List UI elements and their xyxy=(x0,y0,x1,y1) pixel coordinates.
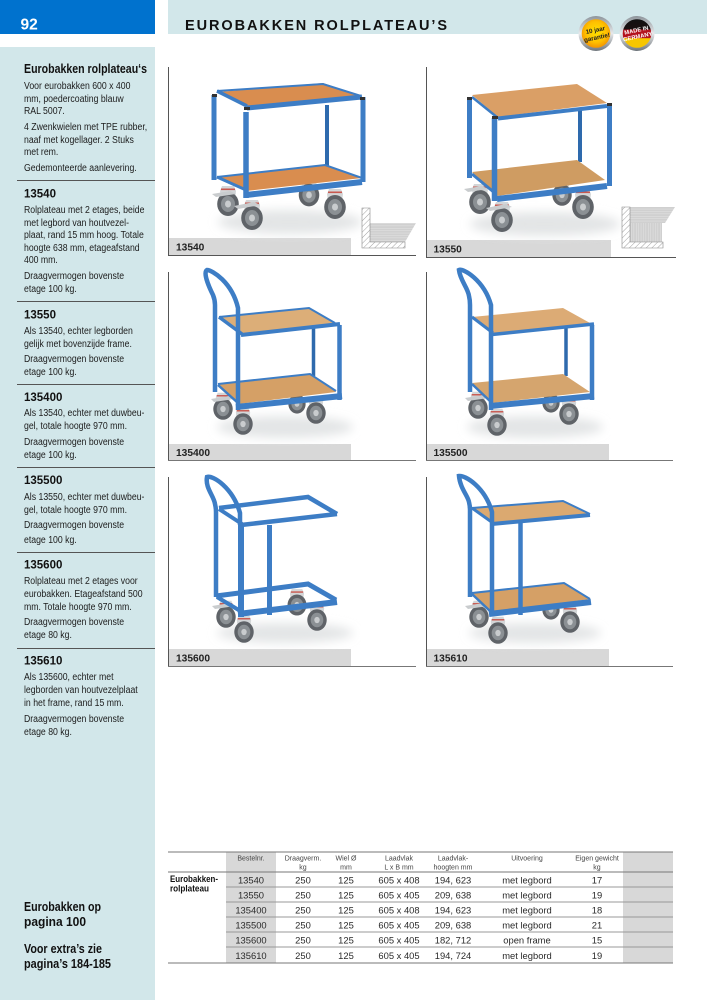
table row: 13550: 605 x 405 xyxy=(378,890,420,900)
sidebar block: 135400: etage 100 kg. xyxy=(24,449,77,461)
table row: 13550 xyxy=(238,890,602,900)
table header: Bestelnr. xyxy=(237,856,265,862)
caption: 135500: 135500 xyxy=(434,448,468,459)
table row label: rolplateau xyxy=(170,884,209,894)
caption: 135500 xyxy=(427,444,609,460)
sidebar cross references: pagina’s 184-185 xyxy=(24,957,111,971)
sidebar cross references xyxy=(24,900,111,971)
sidebar block: 13550: Als 13540, echter legborden xyxy=(24,325,133,337)
sidebar block: 13540: Draagvermogen bovenste xyxy=(24,270,124,282)
badge: 10 jaar garantie: 10 jaar xyxy=(585,25,606,36)
caption: 135400: 135400 xyxy=(176,448,210,459)
photo: cart 135400 xyxy=(206,270,353,438)
sidebar block: 135500: etage 100 kg. xyxy=(24,534,77,546)
table row: 13540: 13540 xyxy=(238,874,264,886)
table row: 135600: 125 xyxy=(338,934,354,946)
caption: 135400 xyxy=(169,444,351,460)
sidebar block: 13550 xyxy=(17,301,155,378)
table row: 13540: 125 xyxy=(338,874,354,886)
table row: 13550: 19 xyxy=(592,890,602,900)
table header: Laadvlak xyxy=(385,856,414,862)
table header: Draagverm. xyxy=(285,856,321,862)
badge: made in Germany: MADE IN xyxy=(624,26,649,37)
sidebar block: 135400: Als 13540, echter met duwbeu- xyxy=(24,407,144,419)
panel: 135610 xyxy=(426,476,673,667)
sidebar block: 13540 xyxy=(17,180,155,295)
sidebar block: 135600: Draagvermogen bovenste xyxy=(24,616,124,628)
sidebar panel xyxy=(0,47,155,1000)
sidebar block: 135610: legborden van houtvezelplaat xyxy=(24,684,138,696)
table row: 135610: 194, 724 xyxy=(435,950,471,961)
panel: 13540 xyxy=(168,67,416,256)
sidebar block: 135610: in het frame, rand 15 mm. xyxy=(24,697,124,709)
table header: kg xyxy=(593,864,601,872)
sidebar block: 135400: gel, totale hoogte 970 mm. xyxy=(24,420,127,432)
sidebar block: 135500: 135500 xyxy=(24,475,62,487)
title band: EUROBAKKEN ROLPLATEAU’S xyxy=(185,18,447,34)
caption: 13550: 13550 xyxy=(434,244,462,256)
sidebar block: 13550: Draagvermogen bovenste xyxy=(24,353,124,365)
table row: 13540 xyxy=(238,874,602,886)
table row: 135500: 209, 638 xyxy=(435,920,471,930)
table row: 135600: 135600 xyxy=(235,934,267,946)
sidebar intro text: Voor eurobakken 600 x 400 xyxy=(24,80,130,92)
title band xyxy=(168,0,707,34)
table row: 135400: 194, 623 xyxy=(435,904,471,916)
table row: 135400 xyxy=(235,904,602,916)
table header: mm xyxy=(340,864,352,872)
photo: cart 135610 xyxy=(459,476,601,644)
table header: Eigen gewicht xyxy=(575,856,619,862)
table row: 135400: 18 xyxy=(592,904,602,916)
caption: 13540: 13540 xyxy=(176,242,205,254)
table row: 135500: 21 xyxy=(592,920,602,930)
table header: Wiel Ø xyxy=(336,856,357,862)
sidebar cross references: pagina 100 xyxy=(24,915,86,929)
table row: 135500: 135500 xyxy=(235,920,267,930)
sidebar block: 13540: plaat, rand 15 mm hoog. Totale xyxy=(24,229,144,241)
table header: hoogten mm xyxy=(434,864,473,872)
sidebar intro text: mm, poedercoating blauw xyxy=(24,93,124,105)
table row: 135610: met legbord xyxy=(502,950,552,961)
sidebar intro text xyxy=(24,62,147,174)
photo: cart 13550 xyxy=(464,84,620,236)
page number tab xyxy=(0,0,155,34)
panel: 135500 xyxy=(426,270,673,461)
sidebar block: 135610: 135610 xyxy=(24,656,62,668)
table row: 135500: 250 xyxy=(295,920,311,930)
table row: 135400: met legbord xyxy=(502,904,552,916)
sidebar block: 135600: etage 80 kg. xyxy=(24,629,72,641)
sidebar cross references: Voor extra’s zie xyxy=(24,942,102,956)
photo: cart 135600 xyxy=(207,477,353,643)
sidebar block: 13540: etage 100 kg. xyxy=(24,283,77,295)
sidebar block: 135600 xyxy=(17,552,155,641)
table header: kg xyxy=(299,864,307,872)
table row: 13550: 125 xyxy=(338,890,354,900)
badge: made in Germany xyxy=(620,16,654,51)
sidebar block: 135600: mm. Totale hoogte 970 mm. xyxy=(24,601,132,613)
sidebar block: 13540: 13540 xyxy=(24,188,56,200)
sidebar block: 135500: Draagvermogen bovenste xyxy=(24,519,124,531)
sidebar intro text: met rem. xyxy=(24,146,58,158)
panel: 135400 xyxy=(168,270,416,461)
badge: 10 jaar garantie: garantie! xyxy=(584,32,611,44)
sidebar block: 13550: 13550 xyxy=(24,310,56,322)
sidebar block: 13540: Rolplateau met 2 etages, beide xyxy=(24,204,144,216)
sidebar intro text: 4 Zwenkwielen met TPE rubber, xyxy=(24,121,147,133)
sidebar block: 135600: 135600 xyxy=(24,560,62,572)
panel: 135600 xyxy=(168,477,416,667)
table row: 13540: 605 x 408 xyxy=(378,874,420,886)
table header xyxy=(237,856,619,872)
table row: 135500 xyxy=(235,920,602,930)
table row: 135500: met legbord xyxy=(502,920,552,930)
table row: 135610: 250 xyxy=(295,950,311,961)
table row: 13550: 250 xyxy=(295,890,311,900)
sidebar block: 135610: Als 135600, echter met xyxy=(24,671,114,683)
sidebar intro text: naaf met kogellager. 2 Stuks xyxy=(24,134,134,146)
sidebar block: 13540: 400 mm. xyxy=(24,254,58,266)
sidebar block: 135600: eurobakken. Etageafstand 500 xyxy=(24,588,143,600)
sidebar intro text: Eurobakken rolplateau‘s xyxy=(24,62,147,76)
table row: 135610: 125 xyxy=(338,950,354,961)
table row label xyxy=(170,874,218,894)
table row: 135400: 605 x 408 xyxy=(378,904,420,916)
table header: Laadvlak- xyxy=(438,856,469,862)
sidebar cross references: Eurobakken op xyxy=(24,900,101,914)
table row: 135600: 182, 712 xyxy=(435,934,471,946)
table row: 135500: 605 x 405 xyxy=(378,920,420,930)
diagram: shelf edge 13550 xyxy=(622,207,675,248)
page number tab: 92 xyxy=(20,16,38,34)
table row: 135600: 605 x 405 xyxy=(378,934,420,946)
sidebar block: 135400 xyxy=(17,384,155,461)
sidebar block: 135400: Draagvermogen bovenste xyxy=(24,436,124,448)
table row: 135400: 135400 xyxy=(235,904,267,916)
caption: 135610 xyxy=(427,649,609,666)
sidebar block: 135610: Draagvermogen bovenste xyxy=(24,713,124,725)
specification table xyxy=(168,852,673,964)
caption: 13540 xyxy=(169,238,351,255)
table row: 135500: 125 xyxy=(338,920,354,930)
sidebar block: 13540: met legbord van houtvezel- xyxy=(24,217,129,229)
panel: 13550 xyxy=(426,67,676,258)
caption: 135600: 135600 xyxy=(176,654,210,664)
caption: 135610: 135610 xyxy=(434,654,468,664)
table row: 13540: met legbord xyxy=(502,874,552,886)
photo: cart 135500 xyxy=(459,270,603,438)
sidebar intro text: Gedemonteerde aanlevering. xyxy=(24,162,137,174)
sidebar block: 135500: Als 13550, echter met duwbeu- xyxy=(24,491,144,503)
sidebar block: 13550: etage 100 kg. xyxy=(24,366,77,378)
table row: 135600: open frame xyxy=(503,934,551,946)
table row: 135600: 15 xyxy=(592,934,602,946)
table row label: Eurobakken- xyxy=(170,874,218,885)
table row: 135610: 19 xyxy=(592,950,602,961)
sidebar block: 135400: 135400 xyxy=(24,392,62,404)
table row: 135610 xyxy=(235,950,602,961)
sidebar block: 135500: gel, totale hoogte 970 mm. xyxy=(24,504,127,516)
table header: Uitvoering xyxy=(511,856,543,862)
sidebar block: 135600: Rolplateau met 2 etages voor xyxy=(24,575,138,587)
table row: 13540: 17 xyxy=(592,874,602,886)
sidebar block: 135610 xyxy=(17,648,155,738)
table row: 135400: 250 xyxy=(295,904,311,916)
sidebar block: 135610: etage 80 kg. xyxy=(24,726,72,738)
table row: 13550: 13550 xyxy=(238,890,264,900)
sidebar block: 135500 xyxy=(17,467,155,546)
table row: 135600 xyxy=(235,934,602,946)
diagram: shelf edge 13540 xyxy=(362,208,416,248)
table header: L x B mm xyxy=(384,864,414,872)
table row: 135400: 125 xyxy=(338,904,354,916)
sidebar intro text: RAL 5007. xyxy=(24,105,65,117)
table row: 13550: met legbord xyxy=(502,890,552,900)
sidebar block: 13550: gelijk met bovenzijde frame. xyxy=(24,338,132,350)
sidebar block: 13540: hoogte 638 mm, etageafstand xyxy=(24,242,140,254)
caption: 13550 xyxy=(427,240,611,257)
table row: 135600: 250 xyxy=(295,934,311,946)
table row: 13550: 209, 638 xyxy=(435,890,471,900)
caption: 135600 xyxy=(169,649,351,666)
badge: 10 jaar garantie xyxy=(578,16,614,51)
table row: 135610: 135610 xyxy=(235,950,267,961)
table row: 13540: 194, 623 xyxy=(435,874,471,886)
badge: made in Germany: GERMANY xyxy=(623,31,653,43)
photo: cart 13540 xyxy=(212,83,365,234)
table row: 135610: 605 x 405 xyxy=(378,950,420,961)
table row: 13540: 250 xyxy=(295,874,311,886)
